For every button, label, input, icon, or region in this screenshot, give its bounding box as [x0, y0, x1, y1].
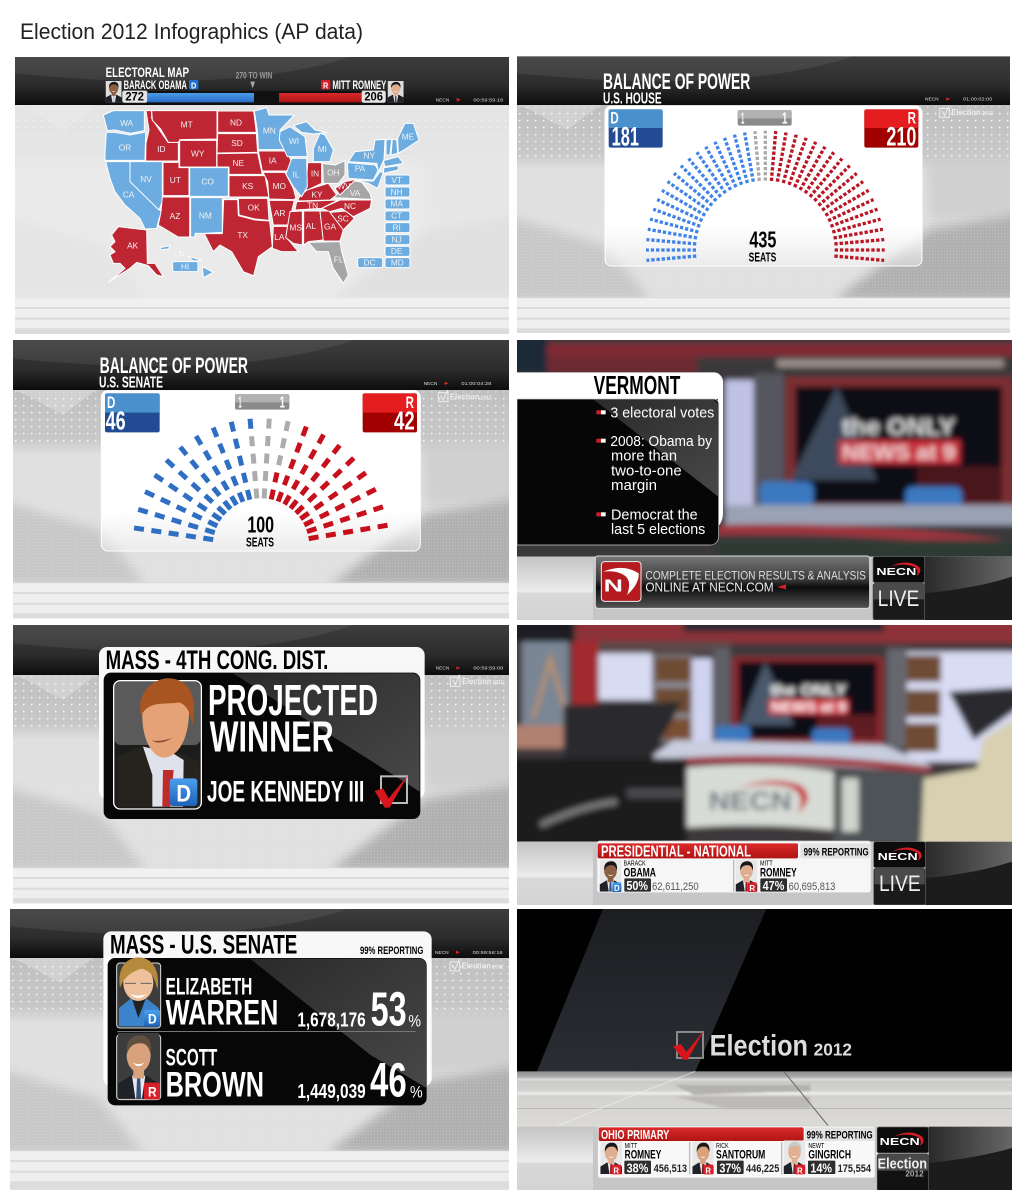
romney result: ROMNEY [625, 1148, 662, 1162]
icon: check box [375, 775, 408, 808]
state labels: MT [181, 119, 193, 129]
bullet: democrat [596, 507, 705, 538]
timecode: NECN [435, 950, 449, 956]
blurred studio background [507, 330, 1024, 567]
race heading: MASS - 4TH CONG. DIST. [106, 645, 328, 675]
total seats: 435 [749, 227, 776, 253]
state labels: ND [230, 118, 242, 128]
obama result: OBAMA [624, 866, 656, 880]
state labels: CT [391, 211, 402, 221]
timecode [435, 950, 503, 956]
romney portrait [388, 81, 404, 102]
necn logo: NECN [880, 1137, 920, 1148]
projected winner text: PROJECTED [208, 676, 378, 725]
timecode: NECN [925, 97, 939, 103]
blurred studio background: NECN [709, 786, 792, 816]
vermont dark panel [517, 399, 719, 545]
obama result [600, 860, 699, 893]
dark card [104, 673, 420, 819]
house seats: independent or undecided [755, 131, 765, 181]
lower third right strip [929, 1127, 1012, 1190]
state labels: KY [311, 189, 323, 199]
state labels: DC [364, 258, 376, 268]
total seats: SEATS [246, 534, 274, 549]
democrat badge: D [191, 80, 196, 90]
icon: necn n logo: N [604, 576, 623, 596]
presidential ticker [597, 841, 871, 893]
state labels: NY [364, 151, 376, 161]
romney result: 456,513 [654, 1163, 687, 1175]
bullet: democrat: last 5 elections [611, 522, 705, 538]
state labels: FL [334, 255, 344, 265]
democrat seat total: 181 [612, 121, 639, 151]
white seat panel [605, 106, 922, 266]
bullet: 2008 result: margin [611, 478, 657, 494]
republican seat total: R [908, 109, 916, 128]
state labels: UT [170, 175, 181, 185]
republican seat total: R [406, 393, 414, 412]
total seats: 100 [247, 512, 274, 538]
blurred studio background: NEWS at 9 [771, 699, 847, 715]
lower third left strip [517, 1127, 593, 1190]
state labels: AR [274, 208, 285, 218]
democrat badge: D [148, 1011, 157, 1027]
state labels: SD [231, 138, 243, 148]
santorum result: 37% [719, 1161, 741, 1175]
panel: mass senate [0, 908, 523, 1191]
brown portrait [117, 1033, 161, 1100]
state labels: NH [391, 187, 403, 197]
state labels: IL [293, 169, 300, 179]
republican seat total: 42 [394, 405, 415, 435]
broadcast timecode [436, 98, 503, 102]
blurred studio background: NEWS at 9 [842, 440, 955, 464]
senate seats: undecided [251, 418, 289, 499]
election logo small [450, 675, 504, 686]
romney result: R [613, 1165, 620, 1175]
election 2012 bug [877, 1154, 929, 1191]
senate seats: democrat [133, 419, 252, 540]
romney electoral count: 206 [364, 90, 383, 104]
vermont white header [517, 372, 723, 527]
democrat seat total: D [610, 109, 619, 128]
election 2012 logo [673, 1029, 852, 1062]
state labels: OR [119, 142, 131, 152]
election logo small: Election [462, 961, 491, 971]
santorum result [689, 1141, 779, 1175]
warren name [166, 974, 278, 1033]
necn logo [877, 1127, 929, 1153]
state labels: MD [391, 257, 404, 267]
brown votes: 1,449,039 [297, 1080, 366, 1103]
romney result: 47% [763, 879, 784, 893]
bullet: 2008 result: 2008: Obama by [610, 434, 713, 450]
obama portrait [106, 81, 122, 102]
state labels: IN [311, 169, 319, 179]
romney bar [279, 93, 362, 102]
necn logo [874, 842, 925, 868]
other seats total: 1 [280, 394, 285, 411]
state labels: PA [355, 164, 366, 174]
election logo small [450, 959, 503, 971]
republican seat total [864, 109, 918, 151]
lower third centre backing [593, 842, 874, 905]
panel: projected winner [0, 625, 526, 908]
republican seat total: 210 [886, 121, 916, 151]
obama result: 50% [626, 879, 648, 893]
state labels: DE [391, 246, 403, 256]
race heading: MASS - U.S. SENATE [110, 929, 297, 959]
election logo small: Election [951, 107, 981, 117]
web address ticker: COMPLETE ELECTION RESULTS & ANALYSIS [645, 568, 866, 582]
romney result: MITT [760, 861, 773, 868]
state labels: NE [233, 158, 245, 168]
republican badge [321, 80, 330, 90]
total seats: SEATS [749, 249, 776, 264]
brown name: BROWN [166, 1065, 264, 1104]
state labels: OH [327, 167, 340, 177]
obama result: 62,611,250 [652, 881, 699, 893]
democrat seat total: 46 [106, 405, 126, 435]
live label [873, 583, 925, 620]
other seats total [235, 394, 289, 411]
state labels: SC [337, 213, 349, 223]
obama result: D [614, 883, 620, 893]
romney result: 60,695,813 [789, 881, 835, 893]
democrat badge [144, 1010, 160, 1027]
dark card [108, 958, 427, 1105]
timecode: 01:00:04:28 [461, 381, 492, 387]
timecode: NECN [436, 666, 450, 672]
live label [874, 868, 925, 905]
state labels: AL [306, 221, 316, 231]
lower third left strip [517, 557, 593, 620]
state labels: CO [201, 176, 214, 186]
obama name: BARACK OBAMA [124, 78, 187, 92]
state labels: OK [248, 203, 260, 213]
brown percentage: % [410, 1082, 423, 1101]
warren votes: 1,678,176 [297, 1008, 366, 1031]
state labels: NM [199, 210, 212, 220]
state labels: WI [289, 136, 299, 146]
democrat badge: D [176, 781, 191, 808]
studio floor [517, 1071, 1014, 1128]
state labels: CA [123, 190, 135, 200]
broadcast timecode: NECN [436, 98, 450, 104]
panel: electoral map [2, 55, 528, 338]
reporting: 99% REPORTING [360, 945, 423, 957]
ohio ticker: 99% REPORTING [807, 1129, 873, 1141]
romney result: MITT [625, 1143, 638, 1150]
state labels: GA [324, 221, 336, 231]
brown name: SCOTT [166, 1045, 218, 1072]
election logo small: 2012 [492, 965, 503, 971]
republican seat total [363, 393, 417, 435]
state labels [119, 118, 415, 272]
progress track [122, 91, 386, 96]
blurred studio background: the ONLY [770, 683, 846, 700]
other seats total: 1 [741, 110, 745, 127]
state labels: WV [337, 181, 351, 191]
live label: LIVE [879, 871, 921, 896]
slanted light band [537, 909, 766, 1071]
timecode: 01:00:02:00 [963, 97, 993, 103]
state labels: KS [242, 181, 254, 191]
warren portrait [117, 957, 161, 1028]
lower third right strip [925, 842, 1012, 905]
democrat seat total [609, 109, 663, 151]
democrat badge [189, 80, 198, 90]
bullet: 2008 result: two-to-one [611, 463, 682, 479]
270 to win marker: 270 TO WIN [236, 70, 273, 80]
election 2012 logo: Election [710, 1029, 808, 1062]
santorum result: R [705, 1165, 712, 1175]
warren percentage: % [408, 1011, 421, 1030]
state labels: TX [237, 230, 248, 240]
state labels: AZ [170, 211, 180, 221]
election 2012 bug: Election [878, 1157, 927, 1173]
state labels: RI [392, 222, 401, 232]
total seats [748, 232, 776, 262]
state labels: NV [140, 174, 152, 184]
heading: BALANCE OF POWER [603, 69, 750, 94]
necn logo [873, 557, 925, 583]
timecode [925, 97, 992, 101]
state labels: WY [191, 149, 205, 159]
romney name: MITT ROMNEY [332, 78, 386, 92]
election logo small: Election [450, 391, 479, 401]
projected winner text [208, 676, 378, 762]
web address ticker [595, 556, 870, 608]
web address ticker: ONLINE AT NECN.COM [645, 580, 774, 595]
republican badge: R [323, 80, 329, 90]
gingrich result: NEWT [808, 1143, 825, 1150]
live label: LIVE [878, 586, 919, 611]
romney result: 38% [627, 1161, 648, 1175]
obama result: BARACK [624, 861, 646, 868]
warren name: WARREN [166, 994, 278, 1033]
lower third right strip [924, 557, 1012, 620]
state labels: VA [350, 188, 361, 198]
brown percentage: 46 [370, 1053, 407, 1107]
vermont heading: VERMONT [594, 370, 680, 400]
election logo small: 2012 [982, 111, 993, 117]
necn logo: NECN [876, 567, 916, 578]
state labels: WA [120, 118, 134, 128]
state labels: MO [273, 181, 287, 191]
state labels: MI [318, 144, 327, 154]
state labels: MS [289, 222, 302, 232]
election logo small: Election [462, 676, 491, 686]
santorum result: RICK [716, 1143, 729, 1150]
election logo small [438, 390, 492, 402]
subheading: U.S. SENATE [99, 375, 163, 392]
romney result: ROMNEY [760, 866, 797, 880]
blurred studio background: the ONLY [842, 414, 955, 441]
senate seats: republican [270, 426, 388, 539]
timecode [436, 666, 504, 672]
panel: balance of power house [504, 55, 1024, 338]
timecode: 00:59:58:16 [473, 950, 503, 956]
gingrich result: R [797, 1165, 803, 1175]
timecode: 00:59:59:08 [473, 666, 504, 672]
subheading: U.S. HOUSE [603, 91, 662, 108]
lower third centre backing [593, 557, 873, 620]
panel: balance of power senate [0, 340, 526, 623]
obama bar [148, 93, 254, 102]
broadcast timecode: 00:59:59:16 [473, 98, 504, 104]
obama electoral count: 272 [125, 90, 144, 104]
state labels: TN [307, 200, 318, 210]
state labels: HI [181, 262, 189, 272]
santorum result: 446,225 [746, 1163, 779, 1175]
democrat seat total [105, 393, 160, 435]
lower third centre backing [593, 1127, 876, 1190]
kennedy portrait [114, 678, 201, 809]
ohio ticker: OHIO PRIMARY [601, 1127, 669, 1142]
republican badge [144, 1083, 160, 1099]
electoral map heading: ELECTORAL MAP [106, 64, 189, 80]
us map [103, 108, 419, 283]
gingrich result: 175,554 [838, 1163, 872, 1175]
state labels: NC [344, 201, 356, 211]
romney result [733, 860, 835, 893]
warren name: ELIZABETH [166, 974, 252, 1001]
white seat panel [101, 391, 420, 551]
other seats total: 1 [238, 394, 242, 411]
bullet: electoral votes: 3 electoral votes [610, 405, 714, 421]
other seats total [738, 110, 792, 127]
gingrich result: 14% [810, 1161, 832, 1175]
white header card [103, 931, 432, 1086]
house seats: republican [771, 131, 885, 260]
romney result [600, 1141, 687, 1175]
brown name [166, 1045, 264, 1104]
state labels: LA [274, 232, 285, 242]
candidate name: JOE KENNEDY III [207, 776, 364, 809]
state labels: MN [263, 125, 276, 135]
other seats total: 1 [782, 110, 788, 127]
presidential ticker: PRESIDENTIAL - NATIONAL [601, 843, 751, 860]
election logo small: 2012 [493, 680, 504, 686]
necn logo: NECN [878, 852, 918, 863]
state labels: IA [269, 155, 277, 165]
icon: necn n logo [601, 562, 641, 601]
bullet: 2008 result [596, 434, 713, 494]
state labels: VT [391, 175, 402, 185]
lower third left strip [517, 842, 593, 905]
election 2012 bug: 2012 [905, 1170, 924, 1179]
panel: presidential national [507, 615, 1024, 905]
romney result: R [749, 883, 756, 893]
timecode: NECN [424, 381, 438, 387]
black backdrop [517, 908, 1014, 1075]
projected winner text: WINNER [210, 713, 334, 762]
presidential ticker: 99% REPORTING [804, 846, 869, 858]
republican badge: R [148, 1083, 157, 1099]
gingrich result: GINGRICH [808, 1148, 851, 1162]
warren percentage: 53 [371, 982, 407, 1036]
santorum result: SANTORUM [716, 1148, 765, 1162]
timecode [424, 382, 491, 385]
state labels: MA [390, 199, 403, 209]
house seats: democrat [646, 132, 753, 260]
election logo small [940, 106, 993, 117]
gingrich result [781, 1140, 872, 1175]
state labels: ME [402, 132, 415, 142]
democrat badge [170, 778, 197, 808]
panel: ohio primary [517, 908, 1014, 1191]
state labels: ID [157, 144, 166, 154]
state labels: NJ [392, 234, 402, 244]
state labels: AK [127, 241, 139, 251]
bullet: democrat: Democrat the [611, 507, 698, 523]
panel: vermont [507, 330, 1024, 620]
blurred studio background [507, 615, 1024, 852]
270 to win marker [236, 70, 273, 88]
democrat seat total: D [107, 393, 115, 412]
election 2012 logo: 2012 [814, 1040, 852, 1060]
heading: BALANCE OF POWER [100, 353, 248, 378]
election logo small: 2012 [481, 395, 492, 401]
bullet: 2008 result: more than [611, 449, 677, 465]
title: Election 2012 Infographics (AP data) [20, 19, 363, 44]
ohio ticker [598, 1126, 875, 1178]
total seats [246, 512, 274, 549]
white header card [99, 647, 425, 799]
